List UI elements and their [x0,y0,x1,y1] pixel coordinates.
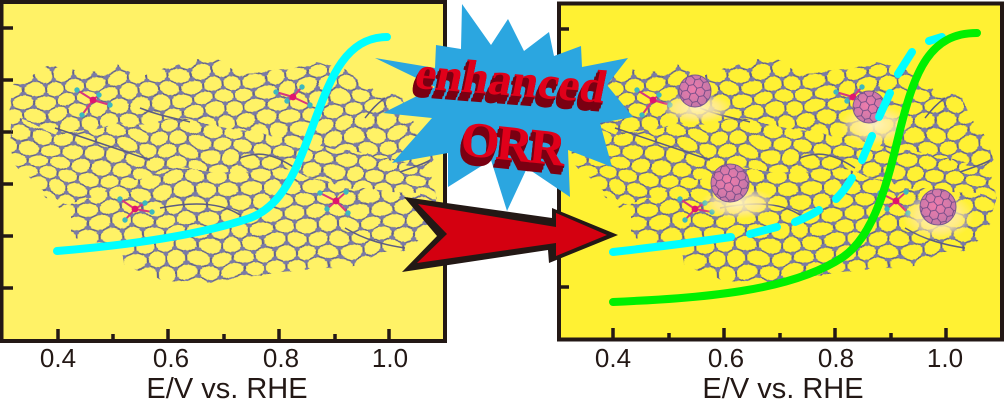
starburst [375,4,633,211]
curve: cyan dashed baseline [613,37,942,252]
x-axis tick labels: 0.6 [708,343,744,373]
x-axis tick labels: 1.0 [927,343,963,373]
nanoparticle 1 with glow [661,75,733,123]
plot background and frame [2,2,445,341]
x-axis tick labels [40,343,408,373]
arrow: red transition arrow [402,197,618,272]
x-axis tick labels: 0.4 [595,343,631,373]
graphene sheet with Fe-N4 sites [570,58,996,282]
nanoparticle 2 with glow [839,91,911,145]
x-axis ticks [613,328,946,339]
nanoparticle 3 with glow [700,164,776,219]
x-axis tick labels [595,343,963,373]
heading: ORR: ORR [458,110,565,177]
curve: green enhanced ORR [613,33,977,302]
heading: enhanced: enhanced [411,47,611,114]
curve: cyan ORR polarization [57,37,387,251]
graphene sheet with Fe-N4 sites [10,58,436,282]
x-axis tick labels: 0.8 [818,343,854,373]
x-axis tick labels: 0.6 [153,343,189,373]
x-axis ticks [58,329,389,340]
plot background and frame [559,4,1002,340]
y-axis ticks [560,29,569,287]
x-axis tick labels: 0.8 [263,343,299,373]
x-axis tick labels: 1.0 [372,343,408,373]
y-axis ticks [3,28,13,288]
panel: left plot [2,2,445,405]
nanoparticle 4 with glow [902,189,974,240]
x-axis title: E/V vs. RHE [146,373,308,405]
panel: right plot [559,4,1002,405]
x-axis tick labels: 0.4 [40,343,76,373]
x-axis title: E/V vs. RHE [702,373,864,405]
